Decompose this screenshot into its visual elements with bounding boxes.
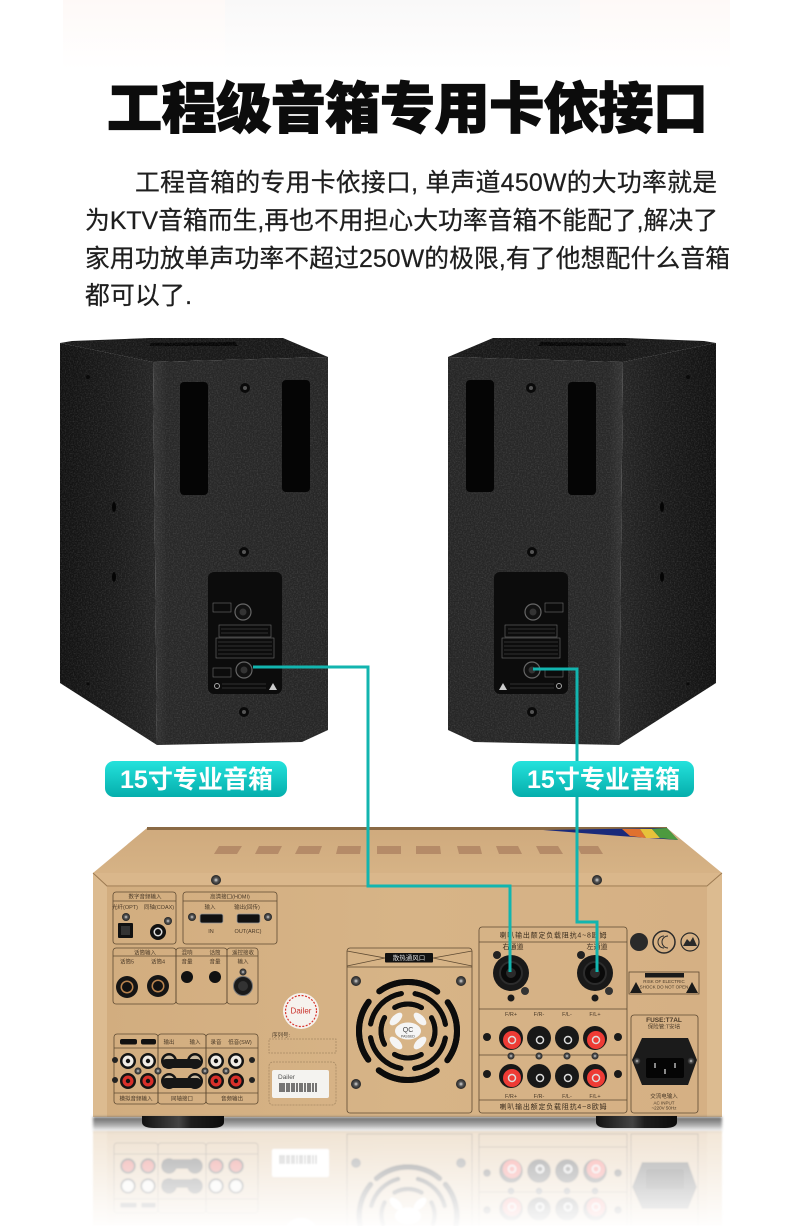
- intro paragraph: 都可以了.: [85, 283, 192, 310]
- amplifier small labels: 录音: [210, 1038, 222, 1046]
- amplifier small labels: F/R+: [505, 1012, 517, 1018]
- amplifier small labels: ~220V 50Hz: [652, 1106, 677, 1110]
- amplifier small labels: FUSE:T7AL: [646, 1017, 682, 1024]
- amplifier small labels: 低音(SW): [228, 1038, 252, 1046]
- badge: right speaker: [512, 761, 694, 797]
- amplifier small labels: OUT(ARC): [235, 929, 262, 935]
- amplifier small labels: 模拟音频输入: [119, 1094, 153, 1102]
- amplifier small labels: 音量: [181, 958, 193, 966]
- amplifier small labels: F/L-: [562, 1094, 572, 1100]
- amplifier small labels: 话筒: [209, 948, 221, 956]
- amplifier small labels: RISK OF ELECTRIC: [643, 979, 685, 984]
- amplifier small labels: Dailer: [291, 1006, 312, 1016]
- amplifier small labels: 左通道: [586, 942, 608, 951]
- connection line: left speaker to right-channel speakon: [253, 667, 510, 972]
- speaker: left: [60, 338, 330, 746]
- amplifier small labels: 交流电输入: [650, 1092, 678, 1100]
- amplifier small labels: 右通道: [502, 942, 524, 951]
- amplifier small labels: F/L+: [589, 1012, 601, 1018]
- amplifier small labels: 高清接口(HDMI): [210, 892, 250, 900]
- amplifier small labels: 输入: [189, 1038, 201, 1046]
- amplifier small labels: 散热通风口: [393, 953, 425, 962]
- amplifier small labels: 话筒5: [120, 958, 134, 966]
- badge: left speaker: 15寸专业音箱: [120, 766, 273, 794]
- amplifier small labels: Dailer: [278, 1074, 296, 1081]
- amplifier small labels: F/R+: [505, 1094, 517, 1100]
- faint ghost reflection at top: [63, 0, 730, 70]
- amplifier small labels: QC: [403, 1027, 413, 1034]
- amplifier small labels: AC INPUT: [653, 1100, 675, 1106]
- amplifier small labels: 输出: [163, 1038, 175, 1046]
- amplifier small labels: 输入: [237, 958, 249, 966]
- amplifier small labels: IN: [208, 929, 214, 935]
- amplifier small labels: 音频输出: [221, 1094, 243, 1102]
- amplifier small labels: 话筒4: [151, 958, 165, 966]
- amplifier small labels: 数字音频输入: [128, 892, 162, 900]
- badge: left speaker: [105, 761, 287, 797]
- amplifier small labels: F/R-: [534, 1012, 545, 1018]
- amplifier small labels: 光纤(OPT): [112, 903, 138, 911]
- amplifier small labels: F/L-: [562, 1012, 572, 1018]
- amplifier small labels: 喇叭输出额定负载阻抗4~8欧姆: [500, 930, 606, 940]
- speaker: right: [446, 338, 716, 746]
- amplifier small labels: F/R-: [534, 1094, 545, 1100]
- amplifier small labels: 输入: [204, 903, 216, 911]
- amplifier small labels: 喇叭输出额定负载阻抗4~8欧姆: [500, 1102, 606, 1111]
- intro paragraph: [85, 169, 730, 310]
- amplifier small labels: 混响: [181, 948, 193, 956]
- amplifier small labels: 话筒输入: [134, 948, 156, 956]
- amplifier small labels: 遥控接收: [232, 948, 254, 956]
- amplifier small labels: SHOCK DO NOT OPEN: [640, 984, 688, 990]
- amplifier feet: [142, 1116, 677, 1128]
- badge: right speaker: 15寸专业音箱: [527, 766, 680, 794]
- intro paragraph: 工程音箱的专用卡依接口, 单声道450W的大功率就是: [135, 169, 717, 197]
- connection line: right speaker to left-channel speakon: [533, 669, 597, 972]
- amplifier small labels: 保险管:T安培: [648, 1022, 681, 1030]
- amplifier small labels: PASSED: [401, 1034, 415, 1038]
- intro paragraph: 为KTV音箱而生,再也不用担心大功率音箱不能配了,解决了: [85, 207, 718, 235]
- amplifier small labels: 序列号:: [272, 1031, 290, 1039]
- intro paragraph: 家用功放单声功率不超过250W的极限,有了他想配什么音箱: [85, 245, 730, 273]
- amplifier small labels: 同轴接口: [171, 1094, 193, 1102]
- amplifier small labels: [112, 892, 688, 1111]
- amplifier small labels: 输出(回传): [234, 903, 260, 911]
- shadow under amplifier: [93, 1117, 722, 1135]
- amplifier small labels: 音量: [209, 958, 221, 966]
- title: 工程级音箱专用卡依接口: [107, 78, 708, 140]
- amplifier small labels: F/L+: [589, 1094, 601, 1100]
- amplifier small labels: 同轴(COAX): [144, 903, 174, 911]
- amplifier floor reflection: [93, 1131, 722, 1226]
- amplifier rear panel: [93, 827, 722, 1117]
